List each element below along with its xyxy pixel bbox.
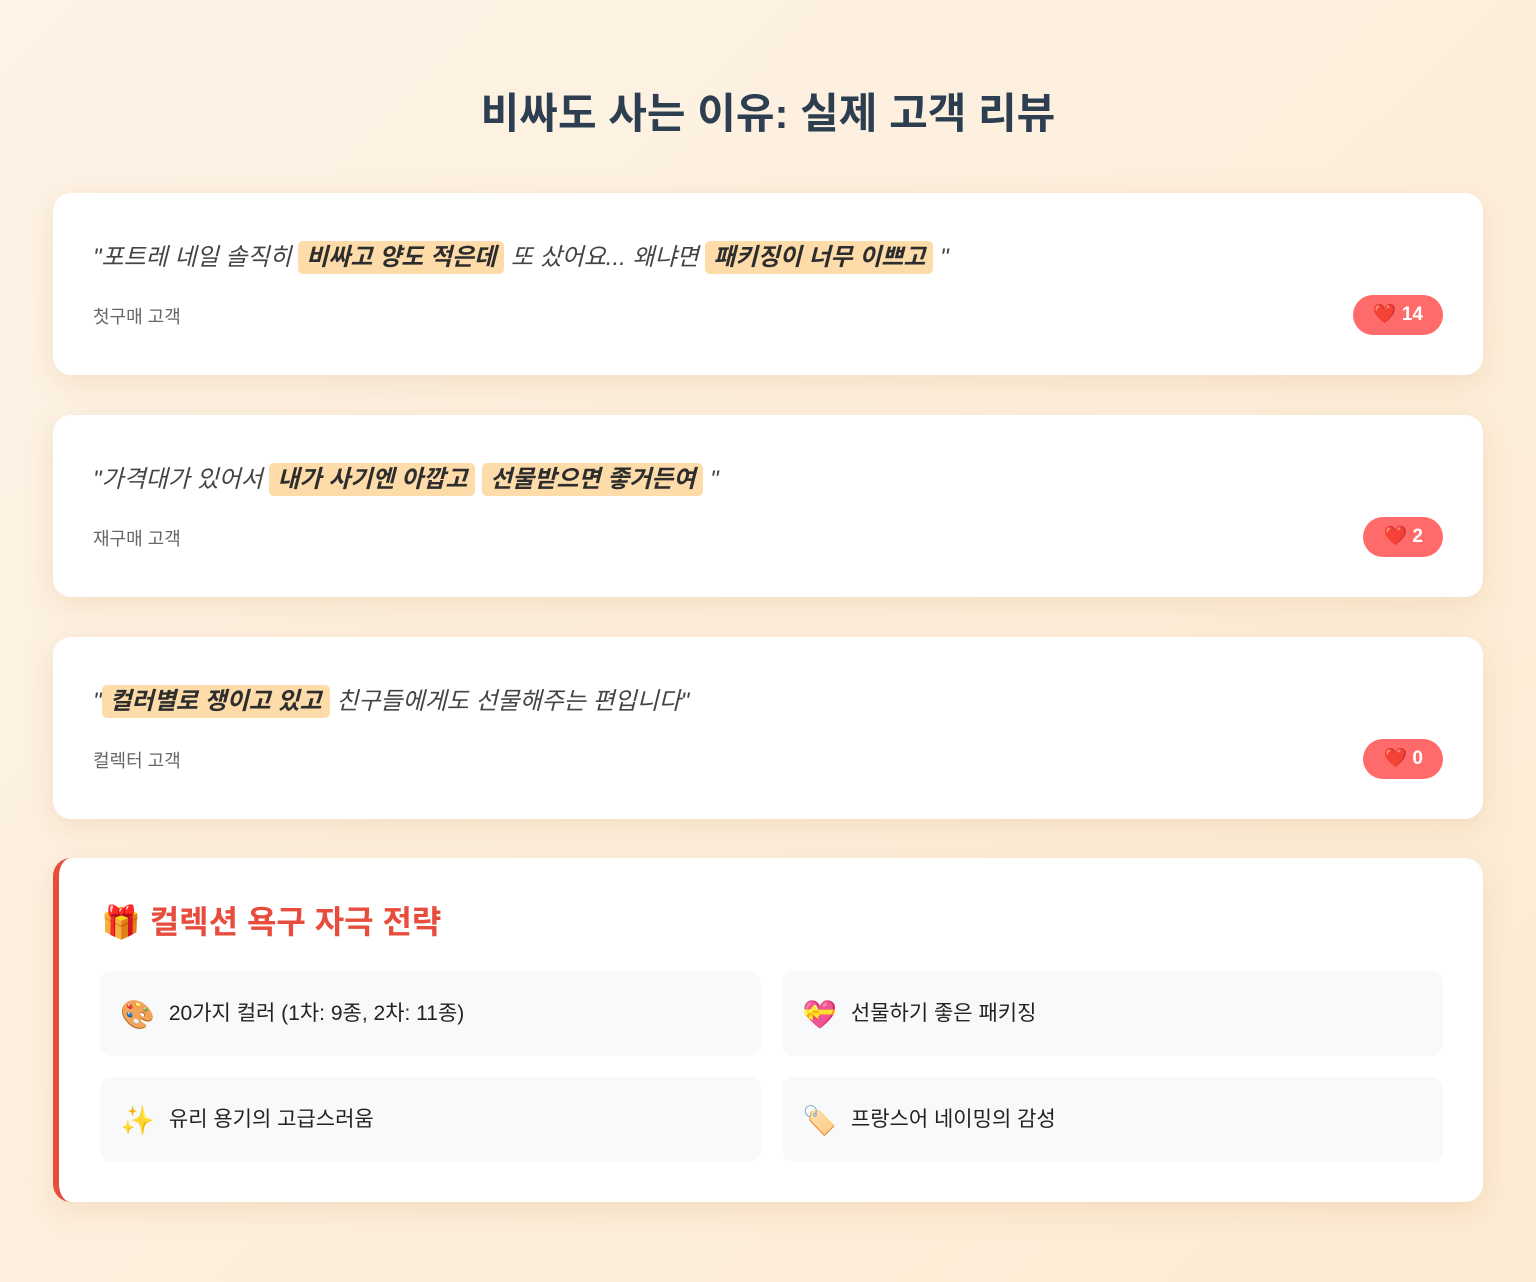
author 1: 첫구매 고객 xyxy=(93,307,181,327)
author 3: 컬렉터 고객 xyxy=(93,751,181,771)
like badge 1 xyxy=(1353,295,1443,335)
like badge 2: ❤️ 2 xyxy=(1383,526,1423,547)
quote 1: "포트레 네일 솔직히 비싸고 양도 적은데 또 샀어요... 왜냐면 패키징이 너무 이쁘고 " xyxy=(93,244,949,271)
quote 2: "가격대가 있어서 내가 사기엔 아깝고 선물받으면 좋거든여 " xyxy=(93,466,719,493)
like badge 2 xyxy=(1363,517,1443,557)
like badge 3: ❤️ 0 xyxy=(1383,748,1423,769)
like badge 1: ❤️ 14 xyxy=(1373,304,1423,325)
like badge 3 xyxy=(1363,739,1443,779)
strategy heading: 🎁 컬렉션 욕구 자극 전략 xyxy=(101,904,441,940)
quote 3: " 컬러별로 쟁이고 있고 친구들에게도 선물해주는 편입니다" xyxy=(93,688,689,715)
item: glass xyxy=(100,1077,761,1162)
title: 비싸도 사는 이유: 실제 고객 리뷰 xyxy=(481,90,1055,137)
item: packaging xyxy=(782,971,1443,1056)
item: colors: 🎨 20가지 컬러 (1차: 9종, 2차: 11종) xyxy=(120,999,464,1030)
author 2: 재구매 고객 xyxy=(93,529,181,549)
item: naming: 🏷️ 프랑스어 네이밍의 감성 xyxy=(802,1105,1056,1136)
item: naming xyxy=(782,1077,1443,1162)
item: glass: ✨ 유리 용기의 고급스러움 xyxy=(120,1105,374,1136)
card: review 1 xyxy=(53,193,1483,375)
card: review 2 xyxy=(53,415,1483,597)
item: packaging: 💝 선물하기 좋은 패키징 xyxy=(802,999,1036,1030)
panel: strategy xyxy=(53,858,1483,1202)
card: review 3 xyxy=(53,637,1483,819)
item: colors xyxy=(100,971,761,1056)
